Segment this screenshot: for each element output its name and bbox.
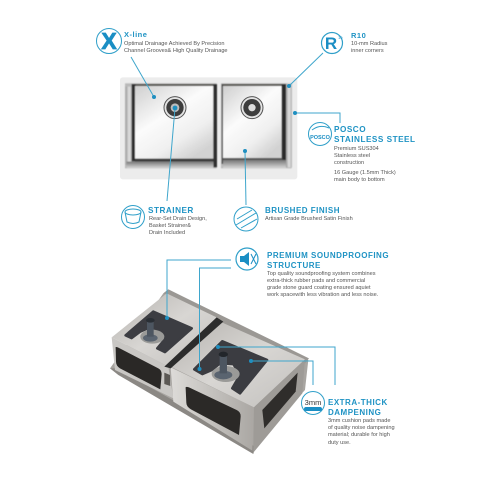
POSCO description: construction 16 Gauge (1.5mm Thick) [334,160,396,176]
icon: R10: 10 [338,35,343,40]
icon: soundproofing [236,248,258,270]
X-line description [124,41,228,54]
POSCO heading: POSCO [334,125,366,134]
icon: POSCO [308,122,332,146]
icon: R10: R [325,34,337,53]
Soundproofing description [267,271,378,298]
Soundproofing description: extra-thick rubber pads and commercial [267,278,365,284]
icon: R10 [322,32,343,54]
right drain pipe [212,352,240,382]
left damping pad [126,312,192,352]
Strainer heading: STRAINER [148,206,194,215]
Soundproofing heading: STRUCTURE [267,260,321,270]
X-line description: Optimal Drainage Achieved By Precision [124,41,224,47]
left drain pipe [140,318,164,344]
R10 description [351,41,388,54]
icon: POSCO: POSCO [310,135,331,141]
right drain [241,97,263,119]
Dampening description: material; durable for high [328,432,390,438]
R10 description: inner corners [351,48,384,54]
bottom sink underside photo [110,289,309,454]
top sink photo [120,77,297,179]
icon: 3mm [302,392,324,414]
leader dots [152,84,297,371]
X-line heading: X-line [124,30,147,39]
Dampening description: duty use. [328,440,351,446]
X-line description: Channel Grooves& High Quality Drainage [124,48,228,54]
POSCO heading [334,125,416,144]
icon: 3mm: 3mm [305,398,321,407]
POSCO description: Stainless steel [334,153,370,159]
Brushed finish description: Artisan Grade Brushed Satin Finish [265,216,353,222]
Strainer description: Drain Included [149,230,185,236]
Soundproofing heading [267,251,389,270]
right damping pad [194,341,267,393]
R10 description: 10-mm Radius [351,41,387,47]
Dampening heading [328,398,388,416]
icon: X-line [96,28,122,54]
Soundproofing heading: PREMIUM SOUNDPROOFING [267,251,389,260]
Dampening heading: DAMPENING [328,408,381,416]
Dampening description: 3mm cushion pads made [328,418,390,424]
POSCO heading: STAINLESS STEEL [334,134,416,144]
POSCO description: main body to bottom [334,177,385,183]
leader lines [131,53,340,385]
icon: strainer [122,206,144,228]
Soundproofing description: work spacewith less vibration and less noise. [267,292,378,298]
Strainer description [149,216,207,236]
Dampening description [328,418,395,446]
Soundproofing description: Top quality soundproofing system combines [267,271,376,277]
left drain [164,97,186,119]
Strainer description: Basket Strainer& [149,223,191,229]
POSCO description [334,146,396,183]
Strainer description: Rear-Set Drain Design, [149,216,207,222]
R10 heading: R10 [351,31,366,40]
Brushed finish heading: BRUSHED FINISH [265,206,340,215]
Dampening description: of quality noise dampening [328,425,395,431]
Dampening heading: EXTRA-THICK [328,398,388,407]
Soundproofing description: grade stone guard coating ensured aquiet [267,285,371,291]
icon: brushed finish [234,207,258,231]
POSCO description: Premium SUS304 [334,146,379,152]
icon: X-line: X [101,28,117,54]
